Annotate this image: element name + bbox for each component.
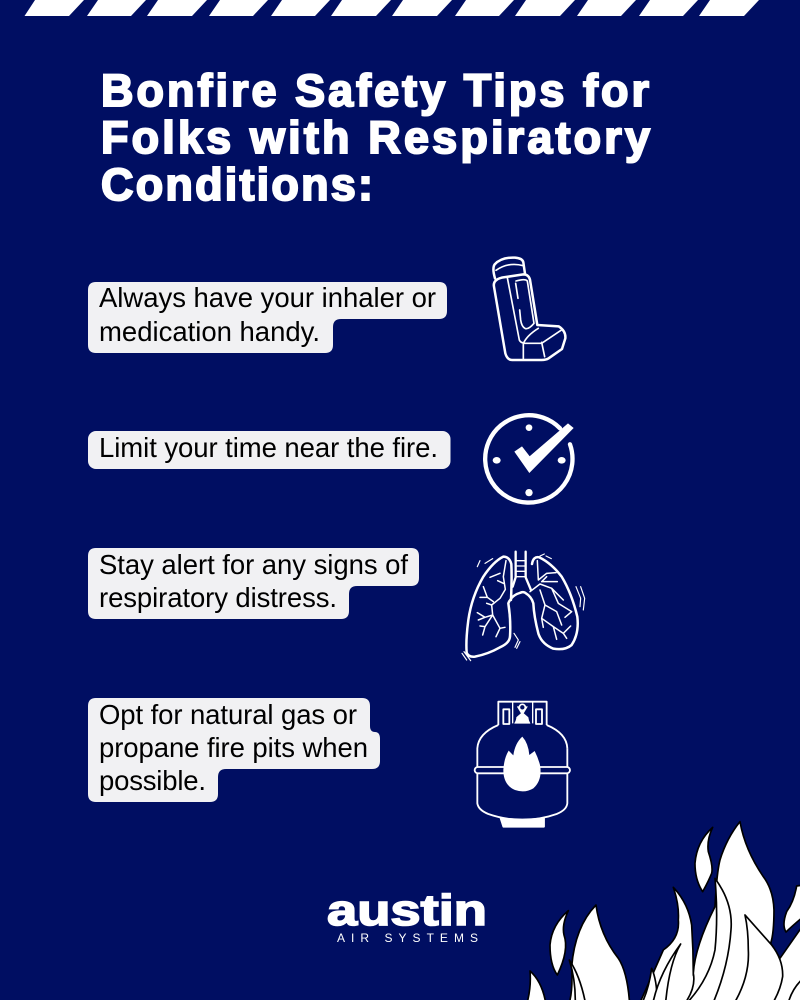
logo: austin air systems: AIR SYSTEMS: [337, 931, 478, 945]
tip 2: time text: Limit your time near the fire.: [99, 432, 438, 463]
tip 3: distress text: Stay alert for any signs of: [99, 549, 408, 580]
top striped band: [24, 0, 759, 16]
tip 4: gas fire pits text: Opt for natural gas or: [99, 699, 357, 730]
tip 4: gas fire pits text: [88, 698, 380, 802]
illustration: white flames: [525, 822, 800, 1000]
logo: austin air systems: austin: [327, 886, 487, 935]
icon: lungs: [462, 552, 585, 661]
tip 1: inhaler text: medication handy.: [99, 316, 320, 347]
title: Conditions:: [101, 159, 373, 210]
tip 3: distress text: respiratory distress.: [99, 582, 337, 613]
tip 4: gas fire pits text: possible.: [99, 765, 206, 796]
logo: austin air systems: [327, 886, 487, 945]
icon: inhaler: [493, 258, 565, 360]
tip 1: inhaler text: [88, 282, 447, 353]
title: Bonfire Safety Tips for: [101, 65, 649, 116]
title: [101, 65, 650, 210]
title: Folks with Respiratory: [101, 112, 650, 163]
tip 1: inhaler text: Always have your inhaler or: [99, 282, 436, 313]
icon: clock with check mark: [485, 415, 574, 503]
tip 3: distress text: [88, 548, 419, 619]
tip 4: gas fire pits text: propane fire pits when: [99, 732, 368, 763]
icon: propane tank with flame: [475, 702, 570, 827]
